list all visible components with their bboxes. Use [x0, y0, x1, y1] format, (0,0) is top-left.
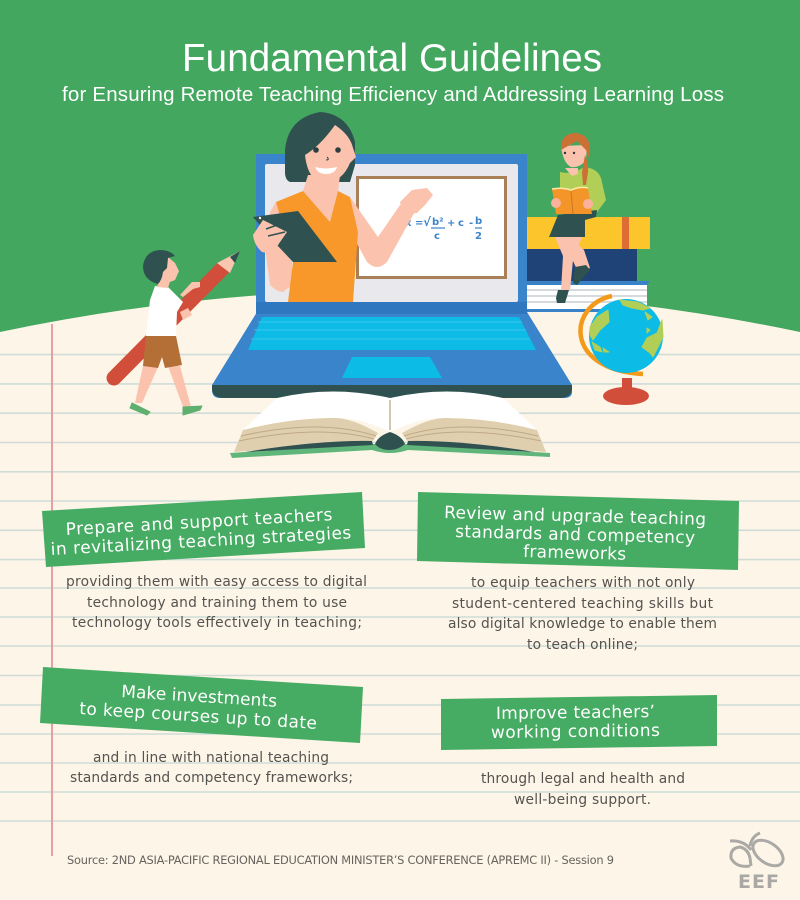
- banner: make investments: to keep courses up to date: [79, 699, 317, 734]
- text block: prepare and support teachers: [66, 574, 367, 631]
- text block: make investments: standards and competency frameworks;: [70, 770, 353, 786]
- illustration: whiteboard with equation: =: [415, 218, 423, 229]
- banner: improve working conditions: [441, 695, 717, 750]
- banner: improve working conditions: Improve teachers’: [496, 702, 655, 724]
- illustration: whiteboard with equation: -: [469, 218, 473, 229]
- illustration: whiteboard with equation: b: [475, 216, 482, 227]
- banner: improve working conditions: working conditions: [491, 721, 660, 743]
- green header background: [0, 0, 800, 332]
- illustration: whiteboard with equation: c: [434, 231, 440, 242]
- text block: prepare and support teachers: technology and training them to use: [87, 595, 347, 611]
- illustration: whiteboard with equation: 2: [475, 231, 482, 242]
- banner: review and upgrade: frameworks: [523, 542, 626, 565]
- text block: improve working conditions: through legal and health and: [481, 771, 685, 787]
- text block: review and upgrade: student-centered teaching skills but: [452, 596, 714, 612]
- banner: prepare and support teachers: Prepare and support teachers: [65, 505, 333, 540]
- text block: review and upgrade: to teach online;: [527, 637, 638, 653]
- banner: make investments: [40, 667, 363, 743]
- banner: review and upgrade: standards and competency: [455, 522, 695, 548]
- illustration: teacher: [253, 112, 433, 302]
- illustration: whiteboard with equation: +: [447, 218, 455, 229]
- text block: make investments: [70, 750, 353, 786]
- source note: Source: 2ND ASIA-PACIFIC REGIONAL EDUCATION MINISTER’S CONFERENCE (APREMC II) - Session 9: [67, 853, 614, 867]
- illustration: globe: [580, 296, 663, 405]
- text block: improve working conditions: well-being support.: [514, 792, 651, 808]
- EEF logo: EEF: [738, 871, 779, 893]
- text block: prepare and support teachers: technology tools effectively in teaching;: [72, 615, 362, 631]
- EEF logo: [730, 833, 788, 893]
- title: Fundamental Guidelines: [182, 37, 602, 80]
- text block: prepare and support teachers: providing them with easy access to digital: [66, 574, 367, 590]
- illustration: whiteboard with equation: [358, 178, 506, 278]
- banner: review and upgrade: Review and upgrade teaching: [444, 503, 706, 530]
- banner: prepare and support teachers: in revitalizing teaching strategies: [50, 523, 352, 560]
- illustration: boy with pencil: [114, 250, 240, 415]
- illustration: whiteboard with equation: b²: [432, 217, 444, 228]
- text block: make investments: and in line with national teaching: [93, 750, 329, 766]
- subtitle: for Ensuring Remote Teaching Efficiency and Addressing Learning Loss: [62, 83, 724, 106]
- illustration: whiteboard with equation: x: [405, 218, 412, 229]
- illustration: stack of books: [527, 217, 650, 312]
- illustration: whiteboard with equation: c: [458, 218, 464, 229]
- text block: review and upgrade: also digital knowledge to enable them: [448, 616, 717, 632]
- text block: review and upgrade: [448, 575, 717, 653]
- banner: make investments: Make investments: [121, 682, 278, 712]
- illustration: whiteboard with equation: √: [423, 215, 432, 229]
- illustration: laptop: [212, 154, 572, 398]
- banner: prepare and support teachers: [42, 492, 365, 567]
- banner: review and upgrade: [417, 492, 739, 570]
- text block: improve working conditions: [481, 771, 685, 808]
- text block: review and upgrade: to equip teachers with not only: [471, 575, 695, 591]
- illustration: girl reading: [549, 133, 606, 303]
- illustration: open book: [230, 392, 550, 458]
